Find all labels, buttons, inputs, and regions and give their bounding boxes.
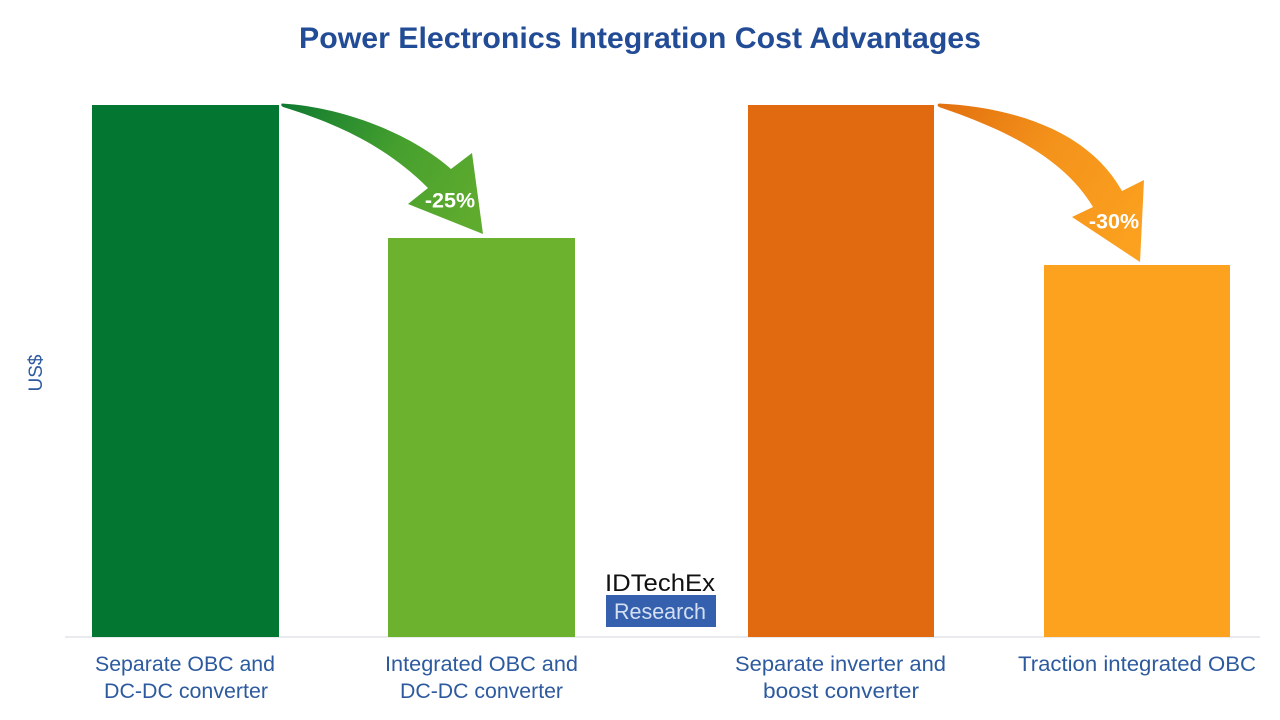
- arrow: green -25%: -25%: [425, 188, 475, 212]
- arrow: green -25%: [281, 104, 483, 234]
- label: separate inverter and boost converter: boost converter: [763, 680, 919, 703]
- bar: separate inverter and boost converter: [748, 105, 934, 637]
- logo: IDTechEx Research: [605, 570, 716, 627]
- baseline axis: [65, 636, 1260, 638]
- bar: integrated OBC and DC-DC converter: [388, 238, 575, 637]
- bar: traction integrated OBC: [1044, 265, 1230, 637]
- label: separate OBC and DC-DC converter: DC-DC converter: [104, 680, 268, 703]
- logo: IDTechEx Research: Research: [614, 599, 706, 624]
- label: integrated OBC and DC-DC converter: DC-DC converter: [400, 680, 563, 703]
- label: integrated OBC and DC-DC converter: Integrated OBC and: [385, 653, 578, 676]
- label: traction integrated OBC: Traction integrated OBC: [1018, 653, 1256, 676]
- arrow: orange -30%: -30%: [1089, 210, 1139, 234]
- y-axis label: US$: [26, 354, 47, 391]
- arrow: orange -30%: [938, 104, 1144, 262]
- label: separate inverter and boost converter: Separate inverter and: [735, 653, 946, 676]
- title: Power Electronics Integration Cost Advantages: [299, 22, 981, 55]
- logo: IDTechEx Research: IDTechEx: [605, 570, 715, 597]
- label: separate OBC and DC-DC converter: Separate OBC and: [95, 653, 275, 676]
- bar: separate OBC and DC-DC converter: [92, 105, 279, 637]
